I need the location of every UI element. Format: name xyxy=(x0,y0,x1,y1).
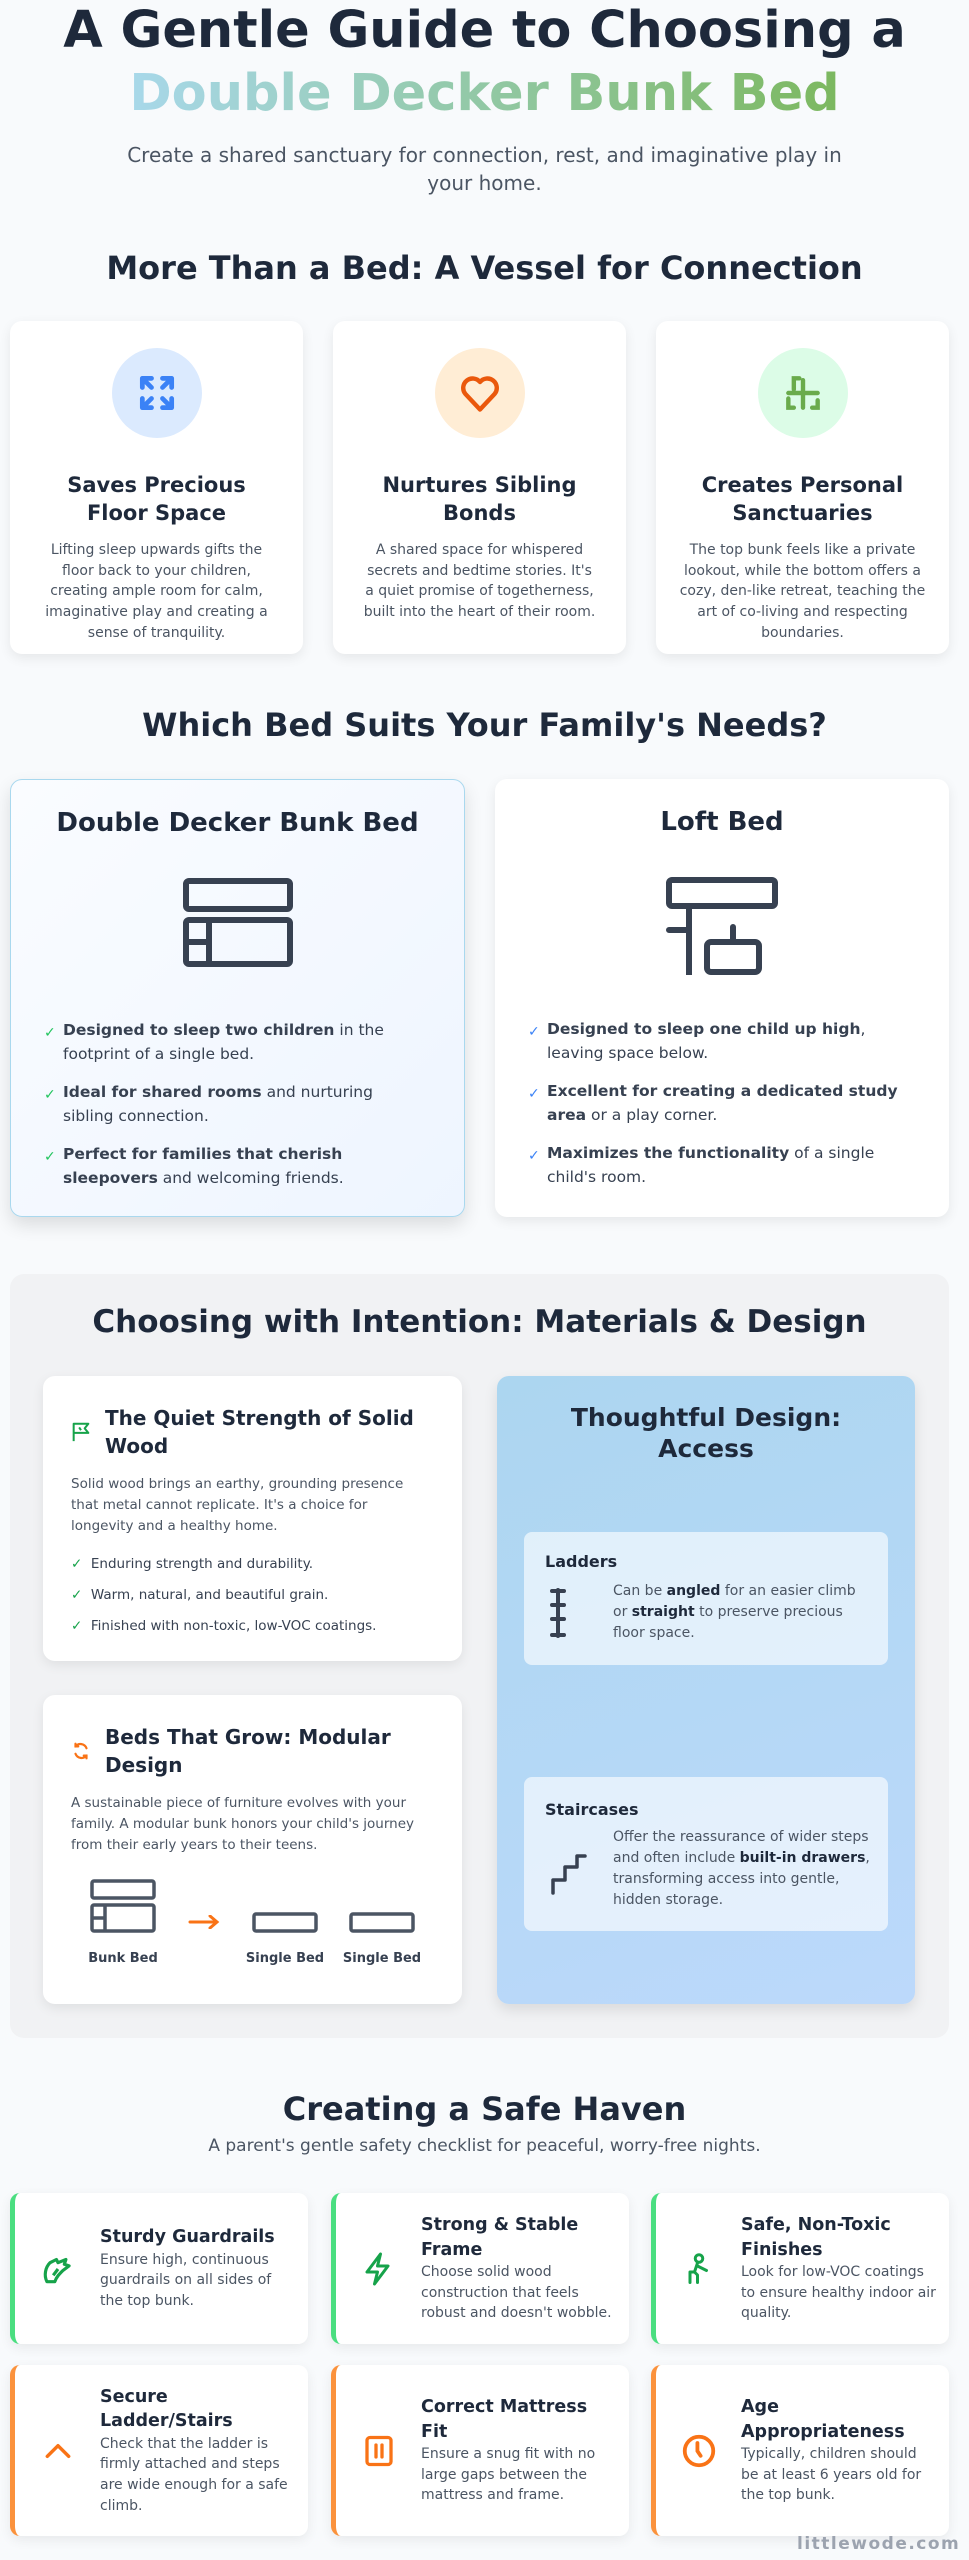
icon: layout xyxy=(758,348,848,438)
diagram: bunk to singles xyxy=(88,1879,421,1966)
subtitle: safety: A parent's gentle safety checklist for peaceful, worry-free nights. xyxy=(208,2136,761,2156)
card: double decker: Ideal for shared rooms and nurturing sibling connection. xyxy=(63,1083,373,1125)
card: sibling bonds: Nurtures Sibling xyxy=(382,473,576,497)
panel: materials & design xyxy=(10,1274,949,2038)
panel: thoughtful design access xyxy=(497,1376,915,2004)
icon: flag xyxy=(72,1422,90,1442)
card: sibling bonds: Bonds xyxy=(443,501,516,525)
diagram: bunk to singles: Single Bed xyxy=(246,1951,324,1966)
card: double decker: ✓ xyxy=(44,1025,56,1041)
heading: which bed: Which Bed Suits Your Family's Needs? xyxy=(142,706,827,744)
card: double decker: ✓ xyxy=(44,1087,56,1103)
card: solid wood: ✓ Warm, natural, and beautiful grain. xyxy=(71,1587,328,1603)
safety card: frame xyxy=(331,2193,629,2344)
card: double decker: ✓ xyxy=(44,1149,56,1165)
safety card: guardrails: Ensure high, continuous guardrails on all sides of the top bunk. xyxy=(100,2252,271,2309)
card: saves floor space xyxy=(10,321,303,654)
card: loft bed: ✓ xyxy=(528,1024,540,1040)
box: ladders: Can be angled for an easier climb or straight to preserve precious floor space. xyxy=(613,1583,856,1641)
card: sanctuaries: The top bunk feels like a private lookout, while the bottom offers a cozy, den-like retreat, teaching the art of co-living and respecting boundaries. xyxy=(680,542,925,641)
card: modular design: A sustainable piece of furniture evolves with your family. A modular bunk honors your child's journey from their early years to their teens. xyxy=(71,1795,414,1853)
safety card: finishes xyxy=(651,2193,949,2344)
card: modular design xyxy=(43,1695,462,2004)
card: solid wood: The Quiet Strength of Solid Wood xyxy=(105,1406,414,1458)
box: staircases: Offer the reassurance of wider steps and often include built-in drawers, transforming access into gentle, hidden storage. xyxy=(613,1829,870,1908)
card: loft bed: Designed to sleep one child up high, leaving space below. xyxy=(547,1020,865,1062)
safety card: frame: Choose solid wood construction that feels robust and doesn't wobble. xyxy=(421,2264,612,2321)
card: sibling bonds: A shared space for whispered secrets and bedtime stories. It's a quiet promise of togetherness, built into the heart of their room. xyxy=(364,542,595,620)
card: saves floor space: Saves Precious xyxy=(67,473,246,497)
watermark: littlewode.com xyxy=(797,2534,960,2554)
safety card: guardrails xyxy=(10,2193,308,2344)
title: A Gentle Guide to Choosing a xyxy=(63,1,906,60)
title: Double Decker Bunk Bed xyxy=(129,64,840,123)
icon: expand arrows xyxy=(112,348,202,438)
safety card: finishes: Look for low-VOC coatings to ensure healthy indoor air quality. xyxy=(741,2264,936,2321)
card: double decker xyxy=(10,779,465,1217)
box: ladders xyxy=(524,1532,888,1665)
subtitle: Create a shared sanctuary for connection, rest, and imaginative play in your home. xyxy=(127,143,842,195)
safety card: ladder: Secure Ladder/Stairs xyxy=(100,2387,233,2431)
icon: loft bed xyxy=(666,877,778,975)
safety card: ladder: Check that the ladder is firmly attached and steps are wide enough for a safe climb. xyxy=(100,2436,288,2514)
icon: stairs xyxy=(551,1854,587,1895)
card: modular design: Beds That Grow: Modular Design xyxy=(105,1725,391,1777)
card: loft bed: Excellent for creating a dedicated study area or a play corner. xyxy=(547,1082,898,1124)
icon: refresh xyxy=(74,1742,88,1760)
card: sanctuaries: Sanctuaries xyxy=(732,501,873,525)
safety card: mattress xyxy=(331,2365,629,2536)
diagram: bunk to singles: Single Bed xyxy=(343,1951,421,1966)
card: double decker: Perfect for families that cherish sleepovers and welcoming friends. xyxy=(63,1145,344,1187)
box: ladders: Ladders xyxy=(545,1552,617,1571)
card: solid wood: ✓ Finished with non-toxic, low-VOC coatings. xyxy=(71,1618,376,1634)
card: saves floor space: Floor Space xyxy=(87,501,226,525)
icon: heart xyxy=(434,348,524,438)
safety card: age: Age Appropriateness xyxy=(741,2397,905,2442)
safety card: mattress: Correct Mattress Fit xyxy=(421,2397,587,2442)
box: staircases: Staircases xyxy=(545,1800,639,1819)
panel: thoughtful design access: Access xyxy=(658,1434,754,1463)
heading: safe haven: Creating a Safe Haven xyxy=(283,2090,686,2128)
card: sibling bonds xyxy=(333,321,626,654)
box: staircases xyxy=(524,1777,888,1931)
safety card: age xyxy=(651,2365,949,2536)
card: solid wood: ✓ Enduring strength and durability. xyxy=(71,1556,313,1572)
card: double decker: Designed to sleep two children in the footprint of a single bed. xyxy=(63,1021,384,1063)
card: loft bed: ✓ xyxy=(528,1148,540,1164)
card: solid wood xyxy=(43,1376,462,1661)
safety card: frame: Strong & Stable Frame xyxy=(421,2215,578,2260)
card: loft bed: Loft Bed xyxy=(660,807,784,837)
safety card: mattress: Ensure a snug fit with no large gaps between the mattress and frame. xyxy=(421,2446,595,2503)
heading: more than a bed: More Than a Bed: A Vessel for Connection xyxy=(106,249,863,287)
icon: bunk bed xyxy=(183,878,293,967)
diagram: bunk to singles: Bunk Bed xyxy=(88,1951,158,1966)
title xyxy=(63,1,906,123)
icon: ladder xyxy=(550,1588,566,1638)
safety card: age: Typically, children should be at least 6 years old for the top bunk. xyxy=(741,2446,921,2503)
safety card: guardrails: Sturdy Guardrails xyxy=(100,2227,275,2247)
card: loft bed: ✓ xyxy=(528,1086,540,1102)
heading: choosing with intention: Choosing with Intention: Materials & Design xyxy=(92,1304,867,1340)
card: saves floor space: Lifting sleep upwards gifts the floor back to your children, creating ample room for calm, imaginative play and creating a sense of tranquility. xyxy=(45,542,268,641)
card: solid wood: Solid wood brings an earthy, grounding presence that metal cannot replicate. It's a choice for longevity and a healthy home. xyxy=(71,1476,403,1534)
panel: thoughtful design access: Thoughtful Design: xyxy=(571,1403,841,1432)
card: sanctuaries: Creates Personal xyxy=(702,473,903,497)
card: double decker: Double Decker Bunk Bed xyxy=(56,808,419,838)
card: loft bed xyxy=(495,779,949,1217)
safety card: ladder xyxy=(10,2365,308,2536)
card: loft bed: Maximizes the functionality of a single child's room. xyxy=(547,1144,874,1186)
card: sanctuaries xyxy=(656,321,949,654)
safety card: finishes: Safe, Non-Toxic Finishes xyxy=(741,2215,891,2260)
